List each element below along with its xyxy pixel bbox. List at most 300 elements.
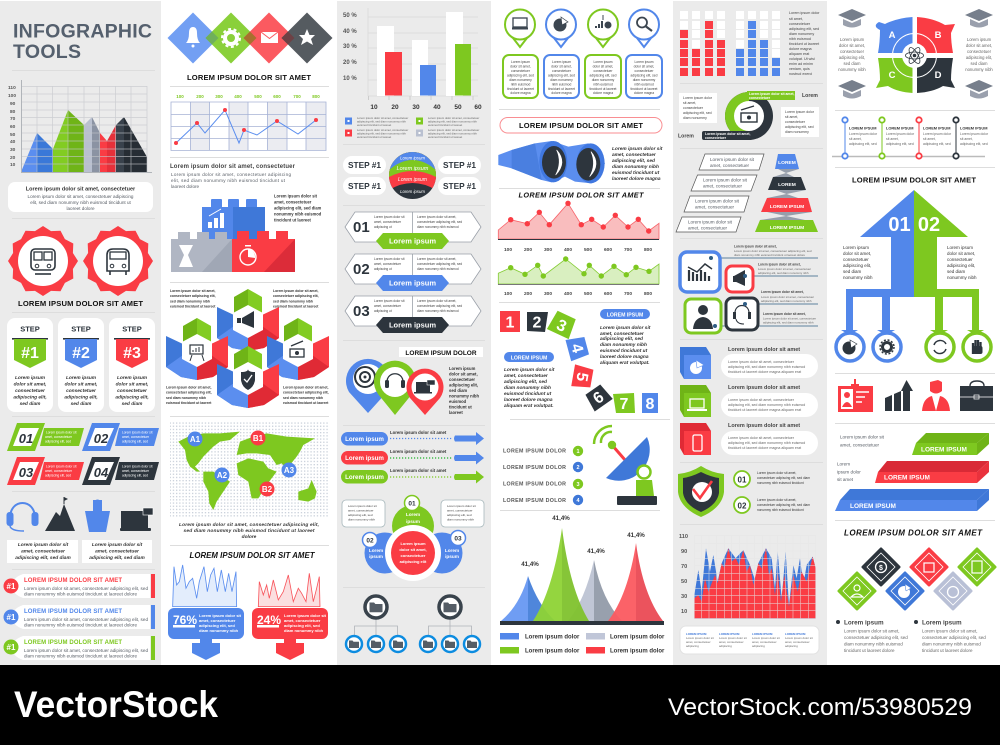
line chart: 800 (312, 94, 320, 99)
pin text: adipiscing elit, (449, 382, 478, 388)
text card (8, 182, 153, 212)
wave chart blue with arrow: adipiscing elit, sed (199, 623, 235, 628)
list row green: #1 (7, 643, 16, 652)
graduation caps with text (838, 9, 993, 98)
chart legend: Lorem ipsum dolor (525, 634, 580, 640)
pin and text card 2: nibh euismod (552, 82, 571, 86)
block chart text: aliquam erat (789, 52, 809, 56)
process row 03: Lorem ipsum dolor sit (374, 299, 405, 303)
double arrow tree diagram: nonummy nibh (843, 275, 873, 280)
step card 2: #2 (72, 345, 90, 362)
numbered list: LOREM IPSUM DOLOR (503, 465, 566, 471)
numbered list: LOREM IPSUM DOLOR (503, 482, 566, 488)
text block: laoreet dolore (171, 184, 200, 189)
jagged area chart: 70 (681, 564, 687, 570)
bullet text right: Lorem ipsum (922, 620, 962, 626)
bar chart: 30 % (343, 44, 357, 50)
process row 01: consectetuer adipiscing elit, sed (417, 220, 462, 224)
step card 3 (109, 318, 155, 412)
step card 1: consectetuer (15, 388, 46, 394)
wave chart red with arrow: Lorem ipsum dolor sit (284, 613, 327, 618)
triangle mountain chart: 41,4% (552, 515, 570, 522)
cube row red: tincidunt ut laoreet dolore magna aliquam erat (728, 446, 801, 450)
numbered tag 03 (7, 457, 84, 485)
circle diagram: amet, consectetuer (447, 508, 473, 512)
ring chart with money icon: consectetuer (705, 136, 727, 140)
numbered arc tiles 1-8: 8 (646, 396, 655, 413)
chart note card: LOREM IPSUM (752, 632, 773, 636)
icon: train badge (8, 226, 78, 296)
binocular text: amet, consectetuer (612, 152, 657, 158)
icon: headset (6, 503, 38, 531)
numbered list: 1 (576, 449, 580, 455)
bullet text right: diam nonummy nibh euismod (922, 642, 981, 646)
cube row green: Lorem ipsum dolor sit amet (728, 385, 800, 391)
double arrow tree diagram: 01 (888, 214, 911, 236)
process row 03 (345, 296, 481, 333)
rounded icon squares with leader lines: Lorem ipsum dolor sit amet, consectetuer (758, 267, 811, 271)
numbered points 01 02: 02 (738, 502, 747, 510)
callout left: laoreet dolore magna (504, 397, 553, 403)
icon: briefcase (960, 381, 993, 411)
text boxes under icons (7, 540, 152, 563)
pin and text card 1: dolore magna (510, 91, 531, 95)
chart note card: adipiscing (752, 644, 765, 648)
numbered tag 02: Lorem ipsum dolor sit (122, 430, 153, 434)
text beside blocks: nonummy nibh euismod (274, 212, 322, 216)
rounded icon squares with leader lines: diam nonummy nibh euismod tincidunt ut laoreet dolore (734, 253, 805, 257)
block chart text: adipiscing elit, sed (789, 27, 819, 31)
pin text: sed diam (449, 388, 467, 393)
rounded icon squares with leader lines: Lorem ipsum dolor sit amet, consectetuer (763, 316, 816, 320)
pin and text card 2: dolor sit amet, (551, 64, 572, 68)
numbered tag 01: amet, consectetuer (45, 435, 73, 439)
numbered list: 3 (576, 482, 580, 488)
world map: A2 (217, 471, 228, 480)
bullet text right: Lorem ipsum dolor sit amet, (922, 628, 978, 634)
circle diagram: Lorem (406, 512, 420, 517)
title: TOOLS (13, 41, 81, 63)
icon row: four diamonds (168, 12, 332, 64)
block chart text: Lorem ipsum dolor (789, 11, 820, 15)
double arrow tree diagram: sed diam (947, 269, 966, 274)
bullet text left: Lorem ipsum dolor sit amet, (844, 628, 900, 634)
pin and text card 4: consectetuer (635, 69, 654, 73)
ring chart with money icon: sit amet, (785, 115, 798, 119)
arrow row red: Lorem ipsum dolor sit amet (390, 449, 447, 454)
3D bar red: LOREM IPSUM (884, 474, 930, 482)
numbered points 01 02: Lorem ipsum dolor sit amet, (757, 471, 796, 475)
pin and text card 4: Lorem ipsum (634, 60, 654, 64)
chart note card: LOREM IPSUM (719, 632, 740, 636)
bar chart: 50 % (343, 13, 357, 19)
numbered points 01 02: nonummy nibh euismod tincidunt (757, 481, 804, 485)
numbered tag 04: adipiscing elit, sed (122, 474, 148, 478)
numbered list: 4 (576, 498, 580, 504)
step card 2: sed diam (71, 401, 92, 407)
3D bar red: ipsum dolor (837, 470, 861, 474)
text boxes under icons: adipiscing elit, sed diam (89, 555, 145, 561)
red area chart: 700 (624, 247, 632, 253)
bar chart (343, 8, 482, 111)
3D bar red: Lorem (837, 462, 850, 466)
hexagon cluster: euismod tincidunt ut laoreet (273, 304, 319, 308)
ribbon pyramid: LOREM (778, 182, 796, 188)
ribbon pyramid: LOREM (778, 160, 796, 166)
3D bar green: Lorem ipsum dolor sit (840, 434, 885, 440)
process row 02: Lorem ipsum (389, 278, 436, 288)
timeline: LOREM IPSUM (849, 126, 876, 130)
skewed text labels: amet, consectetuer (695, 204, 735, 210)
graduation caps with text: consectetuer (840, 49, 865, 54)
numbered arc tiles 1-8: 1 (506, 314, 515, 332)
ribbon pyramid: LOREM IPSUM (770, 225, 804, 231)
pin and text card 3: tincidunt ut laoreet (590, 87, 617, 91)
step pills with sphere: STEP #1 (443, 160, 476, 170)
arrow row blue (341, 430, 484, 446)
ring chart with money icon: adipiscing elit, sed (683, 111, 712, 115)
hexagon cluster: Lorem ipsum dolor sit amet, (273, 289, 318, 293)
process row 01: amet, consectetuer (374, 220, 402, 224)
circle diagram: 02 (366, 538, 374, 544)
footer band: VectorStock (14, 684, 218, 725)
hexagon cluster: sed diam nonummy nibh (273, 300, 313, 304)
ring chart with money icon: Lorem ipsum dolor (785, 110, 815, 114)
double arrow tree diagram: sed diam (843, 269, 862, 274)
3D bar blue (835, 489, 989, 511)
process row 01: Lorem ipsum (389, 236, 436, 246)
process row 01: diam nonummy nibh euismod (417, 225, 459, 229)
icon: bus badge (83, 226, 153, 296)
ribbon pyramid: LOREM IPSUM (770, 204, 804, 210)
3D bar green: amet, consectetuer (840, 442, 880, 448)
binocular text: adipiscing elit, sed (612, 158, 656, 164)
circle diagram: diam nonummy nibh (447, 518, 474, 522)
callout top right: euismod tincidunt ut (600, 348, 648, 354)
line chart: 500 (254, 94, 262, 99)
graduation caps with text: adipiscing elit, (966, 55, 992, 60)
bar chart: 20 (391, 104, 399, 111)
circle diagram: ipsum (406, 519, 420, 524)
binocular text (612, 146, 663, 182)
list row red: Lorem ipsum dolor sit amet, consectetuer adipiscing elit, sed (24, 586, 148, 591)
block chart text: enim ad minim (789, 62, 813, 66)
cube row red: adipiscing elit, sed diam nonummy nibh euismod (728, 441, 805, 445)
list row blue: diam nonummy nibh euismod tincidunt ut laoreet dolore (24, 622, 137, 628)
text card: Lorem ipsum dolor sit amet, consectetuer adipiscing (28, 194, 134, 199)
numbered tag 02: 02 (94, 431, 109, 446)
timeline: sit amet, (923, 137, 936, 141)
arrow row blue: Lorem ipsum (345, 436, 384, 443)
title: INFOGRAPHIC (13, 20, 152, 42)
footer band (0, 665, 1000, 745)
text boxes under icons: amet, consectetuer (95, 548, 140, 554)
ring chart with money icon: Lorem (678, 134, 694, 140)
block chart text: veniam, quis (789, 67, 810, 71)
callout top right: laoreet dolore magna (600, 354, 649, 360)
chart note card: amet, consectetuer (752, 640, 777, 644)
graduation caps with text: adipiscing elit, (839, 55, 865, 60)
double arrow tree diagram: adipiscing elit, (843, 263, 871, 268)
cube row green: Lorem ipsum dolor sit amet, consectetuer (728, 398, 795, 402)
area chart with grid: 40 (10, 139, 16, 145)
pin and text card 1: adipiscing elit, sed (507, 74, 534, 78)
callout top right: amet, consectetuer (600, 331, 645, 337)
timeline (832, 117, 989, 159)
text card: Lorem ipsum dolor sit amet, consectetuer (26, 186, 136, 192)
skewed text labels: Lorem ipsum dolor sit (710, 157, 755, 162)
rounded icon squares with leader lines: adipiscing elit, sed diam nonummy nibh (763, 320, 814, 324)
timeline: sit amet, (886, 137, 899, 141)
numbered arc tiles 1-8: 6 (590, 389, 607, 408)
area chart with grid: 60 (10, 124, 16, 130)
double arrow tree diagram: consectetuer (843, 257, 869, 262)
bullet text left (836, 620, 908, 653)
line chart: 400 (234, 94, 242, 99)
step card 3: STEP (122, 324, 142, 334)
double arrow tree diagram: consectetuer (947, 257, 973, 262)
3D bar red (837, 461, 989, 483)
circle diagram: 01 (408, 500, 416, 508)
world map (170, 421, 328, 518)
timeline: adipiscing elit, sed (923, 142, 951, 146)
wave chart red with arrow: amet, consectetuer (284, 618, 321, 623)
list row green (4, 636, 155, 660)
line chart: 200 (196, 94, 204, 99)
list row red: LOREM IPSUM DOLOR SIT AMET (24, 578, 122, 584)
process row 03: amet, consectetuer (374, 304, 402, 308)
bullet text left: tincidunt ut laoreet dolore (844, 648, 895, 653)
ring chart with money icon: adipiscing elit, sed (785, 125, 814, 129)
chart note card: adipiscing (686, 644, 699, 648)
block chart text: dolore magna (789, 47, 812, 51)
pin text: laoreet (449, 410, 463, 415)
pin and text card 3 (585, 10, 621, 98)
timeline: adipiscing elit, sed (960, 142, 988, 146)
wave chart blue with arrow: diam nonummy nibh (199, 628, 239, 633)
pin and text card 4: nibh euismod (634, 82, 654, 86)
step pills with sphere (343, 148, 481, 199)
text boxes under icons: amet, consectetuer (21, 548, 66, 554)
heading pill: LOREM IPSUM DOLOR SIT AMET (519, 121, 643, 130)
bullet text right: tincidunt ut laoreet dolore (922, 648, 973, 653)
bullet text left: diam nonummy nibh euismod (844, 642, 903, 646)
numbered tag 03: adipiscing elit, sed (45, 474, 71, 478)
ABCD circular diagram: D (935, 70, 942, 81)
circle diagram: diam nonummy nibh (348, 518, 375, 522)
circle diagram: ipsum (369, 554, 383, 559)
chart legend (345, 116, 479, 139)
callout left: amet, consectetuer (504, 373, 549, 379)
green area chart (498, 256, 659, 297)
binocular text: diam nonummy nibh (612, 164, 659, 170)
pin and text card 1: consectetuer (511, 69, 531, 73)
numbered tag 03: 03 (19, 465, 34, 480)
cube row blue: Lorem ipsum dolor sit amet, consectetuer (728, 360, 795, 364)
block chart text: consectetuer (789, 22, 811, 26)
heading: LOREM IPSUM DOLOR SIT AMET (852, 176, 976, 184)
hexagon cluster: sed diam nonummy nibh (283, 396, 323, 400)
graduation caps with text: dolor sit amet, (966, 43, 992, 48)
double arrow tree diagram: dolor sit amet, (947, 251, 975, 256)
area chart with grid: 90 (10, 101, 16, 107)
skewed text labels: Lorem ipsum dolor sit (695, 198, 740, 204)
wave chart red with arrow: 24% (257, 613, 281, 627)
ring chart with money icon: Lorem ipsum dolor sit amet, (705, 132, 750, 136)
numbered arc tiles 1-8: 4 (567, 342, 586, 355)
callout left: Lorem ipsum dolor sit (504, 367, 555, 373)
numbered list: 2 (576, 465, 580, 471)
binocular text: laoreet dolore magna (612, 176, 661, 182)
chart note card: amet, consectetuer (719, 640, 744, 644)
binocular text: Lorem ipsum dolor sit (612, 146, 663, 152)
step card 3: adipiscing elit, (115, 394, 149, 400)
numbered points 01 02: 01 (738, 476, 747, 484)
timeline: Lorem ipsum dolor (886, 132, 915, 136)
circle diagram: consectetuer (401, 553, 426, 558)
bar chart: 10 (370, 104, 378, 111)
hexagon cluster: euismod tincidunt ut laoreet (283, 401, 329, 405)
numbered points 01 02 (734, 471, 810, 513)
pin and text card 3: dolor sit amet, (593, 64, 613, 68)
ring chart with money icon: Lorem ipsum dolor (683, 96, 713, 100)
cube row green: tincidunt ut laoreet dolore magna aliquam erat (728, 408, 801, 412)
list row blue: #1 (7, 613, 16, 622)
arrow row red (341, 449, 484, 464)
rounded icon squares with leader lines: Lorem ipsum dolor sit amet, consectetuer (761, 295, 814, 299)
hexagon cluster: consectetuer adipiscing elit, (170, 294, 216, 298)
numbered tag 02: adipiscing elit, sed (122, 440, 148, 444)
double arrow tree diagram: 02 (918, 214, 940, 236)
numbered tag 01: adipiscing elit, sed (45, 440, 71, 444)
numbered tag 04: Lorem ipsum dolor sit (122, 464, 153, 468)
world map: B2 (262, 485, 273, 494)
pin and text card 2: Lorem ipsum (552, 60, 571, 64)
text card: laoreet dolore (66, 206, 95, 211)
step card 1 (7, 318, 53, 412)
text beside blocks: Lorem ipsum dolor sit (274, 194, 318, 198)
numbered arc tiles 1-8 (500, 310, 658, 413)
cube row blue: Lorem ipsum dolor sit amet (728, 347, 800, 353)
wave chart red with arrow: adipiscing elit, sed (284, 623, 320, 628)
numbered list: LOREM IPSUM DOLOR (503, 498, 566, 504)
icon: mountain with flag (45, 497, 75, 531)
wave chart blue with arrow: Lorem ipsum dolor sit (199, 613, 242, 618)
chart note card: amet, consectetuer (686, 640, 711, 644)
green area chart: 600 (604, 291, 612, 297)
timeline: adipiscing elit, sed (849, 142, 877, 146)
numbered points 01 02: consectetuer adipiscing elit, sed diam (757, 476, 810, 480)
green area chart: 300 (544, 291, 552, 297)
step card 1: STEP (20, 324, 40, 334)
step card 2: STEP (71, 324, 91, 334)
building blocks (171, 199, 295, 272)
callout top right: LOREM IPSUM (607, 312, 643, 318)
ring chart with money icon: consectetuer (749, 96, 771, 100)
map caption: sed diam nonummy nibh euismod tincidunt ut laoreet (184, 528, 315, 534)
cube row green (680, 385, 818, 417)
pin and text card 4: adipiscing elit, sed (631, 74, 658, 78)
triangle mountain chart: 41,4% (521, 561, 539, 568)
timeline: LOREM IPSUM (960, 126, 987, 130)
ring chart with money icon: consectetuer (683, 106, 704, 110)
chart note card: LOREM IPSUM (686, 632, 707, 636)
list row blue: Lorem ipsum dolor sit amet, consectetuer adipiscing elit, sed (24, 617, 148, 622)
bullet text left: Lorem ipsum (844, 620, 884, 626)
bar chart: 50 (454, 104, 462, 111)
red area chart: 500 (584, 247, 592, 253)
process row 02: Lorem ipsum dolor sit amet, (417, 257, 456, 261)
pin text: consectetuer (449, 377, 475, 382)
3D bar blue: LOREM IPSUM (850, 503, 896, 510)
3D bar green: LOREM IPSUM (921, 446, 967, 454)
diamond icon set: $ (879, 565, 883, 572)
area chart with grid: 80 (10, 109, 16, 115)
chart legend: Lorem ipsum dolor sit amet, consectetuer (428, 116, 479, 120)
wave chart blue with arrow (168, 565, 244, 660)
red area chart: 100 (504, 247, 512, 253)
ring chart with money icon: Lorem (802, 93, 818, 99)
block chart text (789, 11, 820, 76)
process row 03: Lorem ipsum (389, 320, 436, 330)
map caption (179, 522, 319, 540)
cube row red: Lorem ipsum dolor sit amet, consectetuer (728, 436, 795, 440)
red area chart: 200 (524, 247, 532, 253)
chart note card: Lorem ipsum dolor sit (752, 636, 780, 640)
process row 01: Lorem ipsum dolor sit (374, 215, 405, 219)
callout top right: aliquam erat volutpat. (600, 360, 650, 366)
rounded icon squares with leader lines: adipiscing elit, sed diam nonummy nibh (761, 299, 812, 303)
timeline: Lorem ipsum dolor (960, 132, 989, 136)
bar chart: 30 (412, 104, 420, 111)
jagged area chart: 10 (681, 609, 687, 615)
graduation caps with text: nonummy nibh (838, 67, 866, 72)
circle diagram: ipsum (445, 554, 459, 559)
pin and text card 3: adipiscing elit, sed (590, 74, 617, 78)
numbered list: LOREM IPSUM DOLOR (503, 448, 566, 454)
triangle mountain chart: 41,4% (587, 548, 605, 555)
triangle mountain chart (500, 515, 664, 625)
chart legend: Lorem ipsum dolor sit amet, consectetuer (357, 116, 408, 120)
numbered tag 01: Lorem ipsum dolor sit (46, 430, 77, 434)
numbered points 01 02: Lorem ipsum dolor sit amet, (757, 498, 796, 502)
text beside blocks: tincidunt ut laoreet (274, 218, 311, 222)
rounded icon squares with leader lines (680, 244, 818, 333)
diamond icon set (839, 549, 995, 609)
area chart with grid: 10 (10, 162, 16, 168)
double arrow tree diagram: nonummy nibh (947, 275, 977, 280)
step pills with sphere: STEP #1 (443, 181, 476, 191)
process row 02 (345, 254, 481, 291)
numbered points 01 02: nonummy nibh euismod tincidunt (757, 508, 804, 512)
text block: Lorem ipsum dolor sit amet, consectetuer (170, 164, 296, 170)
heading: LOREM IPSUM DOLOR SIT AMET (844, 528, 983, 538)
chart note card: adipiscing (785, 644, 798, 648)
block chart text: nibh euismod (789, 37, 811, 41)
pin and text card 1: dolor sit amet, (510, 64, 531, 68)
timeline: adipiscing elit, sed (886, 142, 914, 146)
graduation caps with text: sed diam (970, 61, 988, 66)
map caption: dolore (242, 534, 257, 540)
icon: id badge (838, 379, 873, 412)
title (13, 20, 152, 63)
pin and text card 4: tincidunt ut laoreet (631, 87, 658, 91)
icon: growth chart (885, 380, 913, 411)
block chart red (680, 11, 725, 76)
skewed text labels (676, 154, 764, 232)
block chart text: sit amet, (789, 17, 803, 21)
skewed text labels: amet, consectetuer (703, 184, 743, 188)
